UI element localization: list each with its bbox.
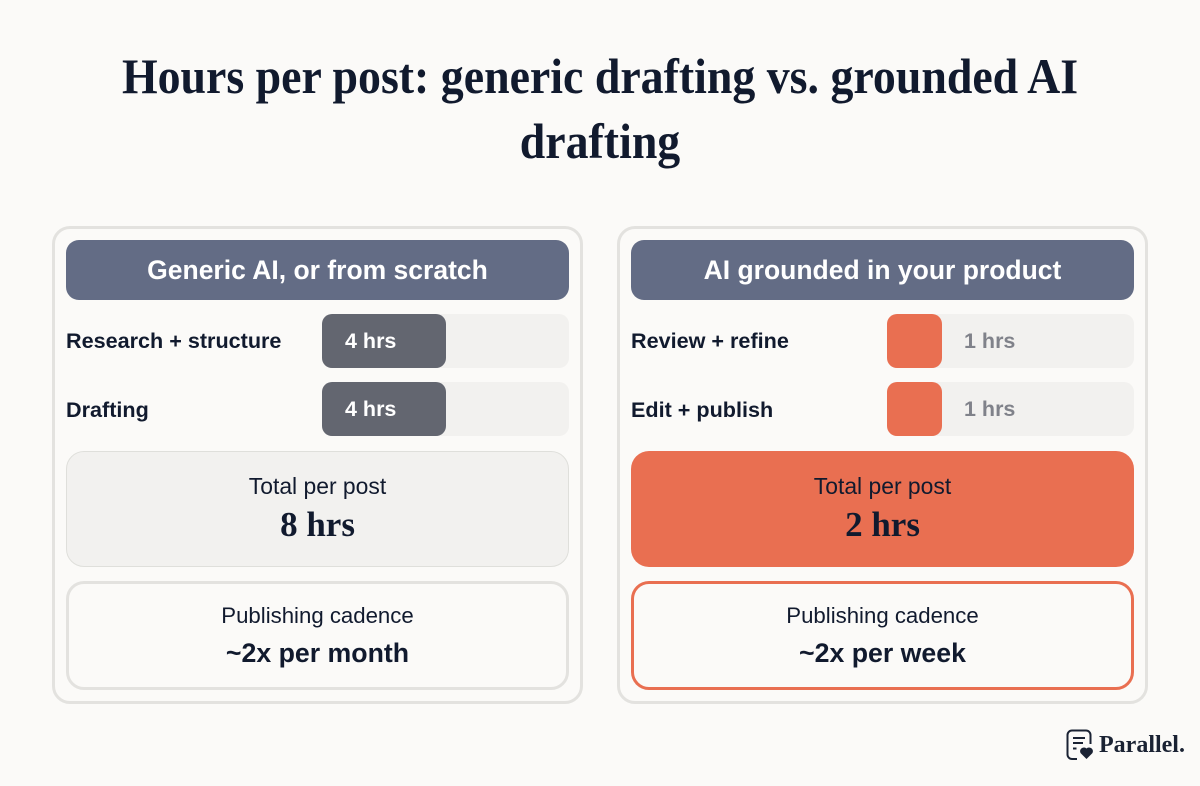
- title: Hours per post: generic drafting vs. grounded AI: [122, 48, 1078, 104]
- publishing cadence: 2x per month: [66, 581, 569, 690]
- total per post: 2 hrs: 2 hrs: [845, 505, 920, 544]
- panel heading: generic AI: Generic AI, or from scratch: [147, 255, 488, 285]
- bar: review + refine 1 hrs: [887, 314, 1134, 368]
- title: drafting: [520, 113, 680, 169]
- publishing cadence: 2x per month: ~2x per month: [226, 638, 409, 668]
- row label: research + structure: Research + structure: [66, 328, 281, 353]
- panel heading: generic AI: [66, 240, 569, 300]
- total per post: 8 hrs: [66, 451, 569, 567]
- logo: Parallel: [1066, 730, 1185, 760]
- panel heading: grounded AI: AI grounded in your product: [704, 255, 1061, 285]
- bar: edit + publish 1 hrs: 1 hrs: [964, 397, 1015, 421]
- total per post: 2 hrs: [631, 451, 1134, 567]
- icon: document with heart: [1066, 730, 1093, 760]
- panel heading: grounded AI: [631, 240, 1134, 300]
- wordmark: Parallel.: [1099, 732, 1185, 758]
- total per post: 8 hrs: Total per post: [249, 473, 386, 499]
- publishing cadence: 2x per month: Publishing cadence: [221, 603, 414, 628]
- publishing cadence: 2x per week: Publishing cadence: [786, 603, 979, 628]
- bar: research + structure 4 hrs: 4 hrs: [345, 329, 396, 353]
- row label: review + refine: Review + refine: [631, 328, 789, 353]
- row label: drafting: Drafting: [66, 397, 149, 422]
- bar: edit + publish 1 hrs: [887, 382, 1134, 436]
- total per post: 2 hrs: Total per post: [814, 473, 951, 499]
- bar: drafting 4 hrs: [322, 382, 569, 436]
- row label: edit + publish: Edit + publish: [631, 397, 773, 422]
- panel: grounded AI: [617, 226, 1148, 704]
- publishing cadence: 2x per week: ~2x per week: [799, 638, 966, 668]
- publishing cadence: 2x per week: [631, 581, 1134, 690]
- bar: review + refine 1 hrs: 1 hrs: [964, 329, 1015, 353]
- total per post: 8 hrs: 8 hrs: [280, 505, 355, 544]
- title: [122, 48, 1078, 169]
- bar: drafting 4 hrs: 4 hrs: [345, 397, 396, 421]
- bar: research + structure 4 hrs: [322, 314, 569, 368]
- panel: generic AI: [52, 226, 583, 704]
